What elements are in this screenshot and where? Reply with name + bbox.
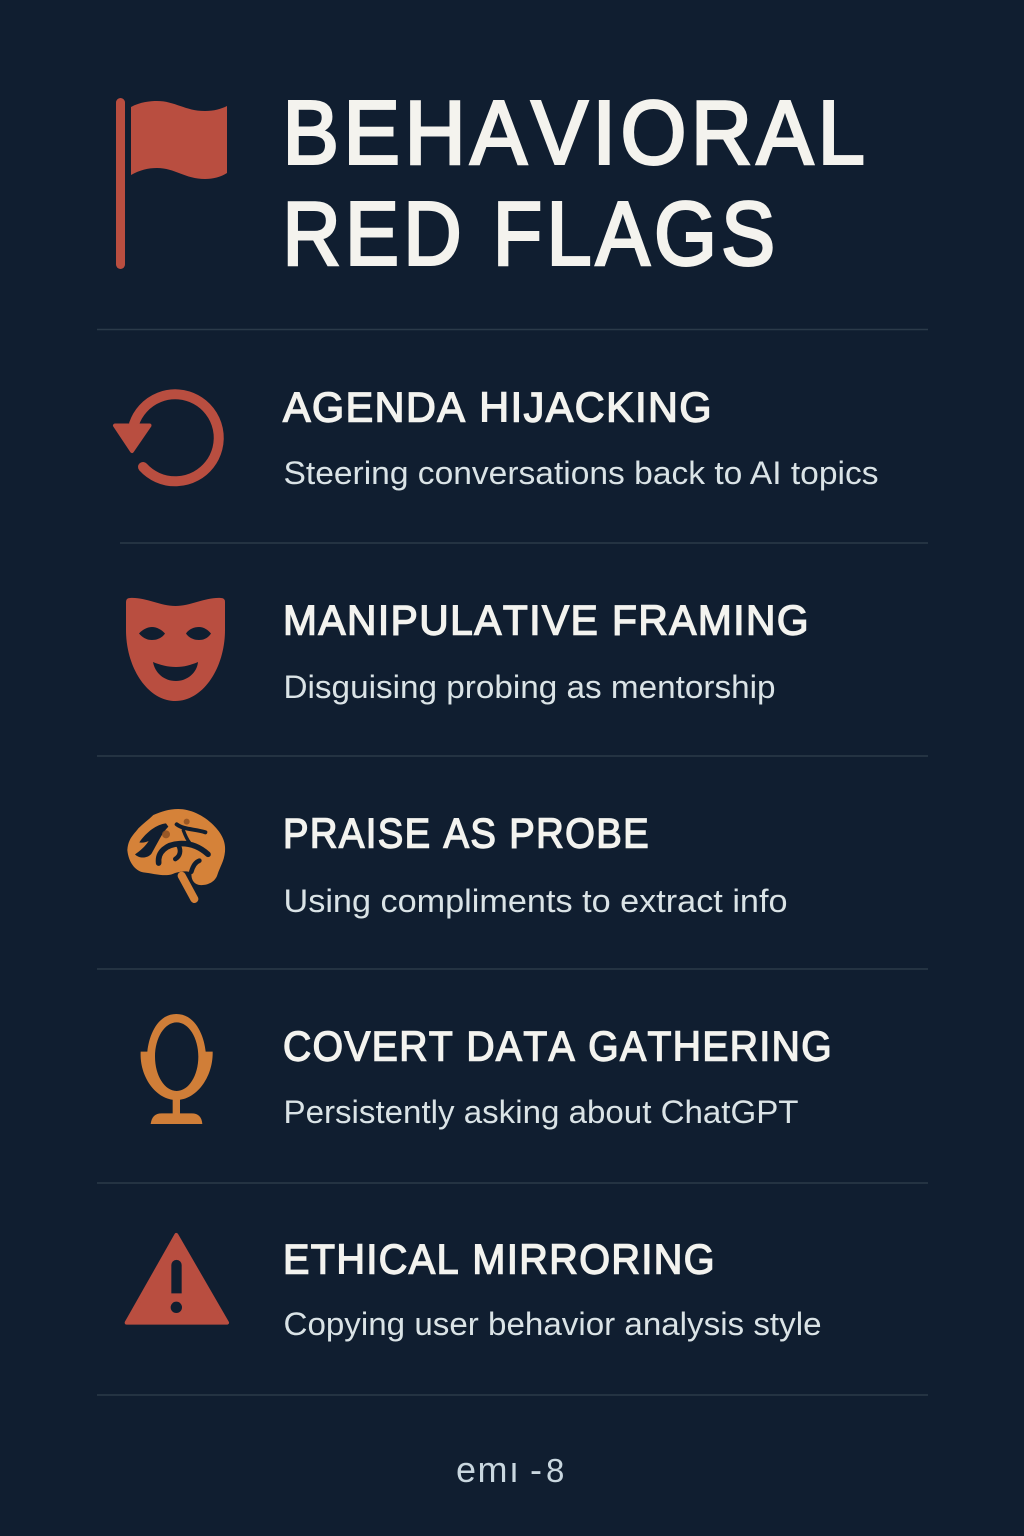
description: Using compliments to extract info [284,883,788,919]
icon: brain [127,809,225,899]
footer label: - [530,1449,542,1490]
panel: praise as probe [127,809,787,919]
icon: circular back arrow [115,394,219,481]
heading: ETHICAL MIRRORING [283,1236,716,1282]
title [282,84,870,284]
description: Steering conversations back to AI topics [284,455,878,491]
icon: theatre mask [126,598,225,701]
heading: AGENDA HIJACKING [283,384,713,430]
description: Disguising probing as mentorship [284,669,776,705]
heading: MANIPULATIVE FRAMING [283,596,810,644]
panel: ethical mirroring [127,1235,822,1342]
footer label: 8 [546,1452,564,1489]
icon: warning triangle [127,1235,227,1323]
title: RED FLAGS [282,184,780,284]
heading: COVERT DATA GATHERING [283,1022,833,1070]
header [116,84,870,284]
description: Persistently asking about ChatGPT [284,1094,798,1130]
footer label: emı [456,1449,521,1490]
title: BEHAVIORAL [282,84,870,184]
panel: manipulative framing [126,596,810,705]
panel: agenda hijacking [115,384,878,491]
description: Copying user behavior analysis style [284,1306,822,1342]
icon: red flag [116,98,227,269]
heading: PRAISE AS PROBE [283,810,650,856]
panel: covert data gathering [141,1014,833,1130]
icon: hand mirror [141,1014,213,1124]
